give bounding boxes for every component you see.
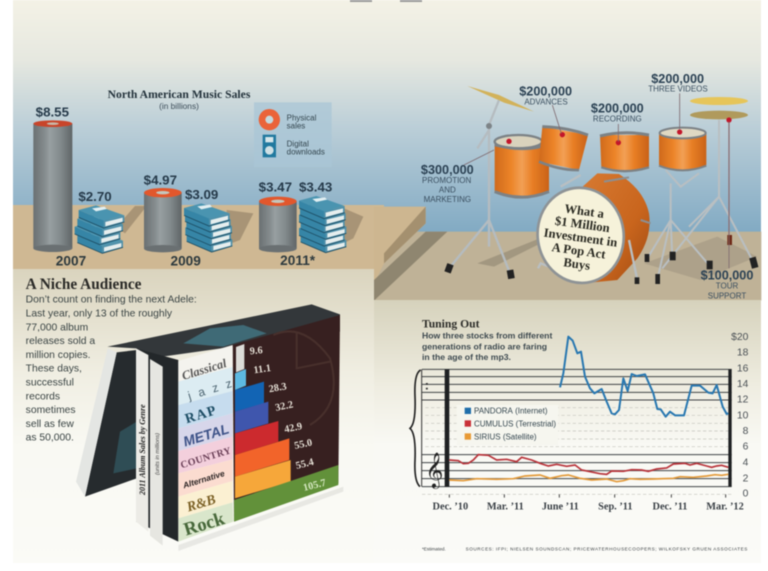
subheading: (in billions): [159, 101, 199, 111]
hardware stands: [645, 120, 758, 284]
body text: Last year, only 13 of the roughly: [26, 308, 173, 319]
legend: Physical: [287, 113, 317, 122]
genre labels: RAP: [183, 403, 219, 427]
panel: tuning out stock chart: [410, 318, 749, 552]
2011 bars: $3.43: [299, 180, 332, 195]
cost labels: TOUR: [716, 282, 738, 291]
bar values: 105.7: [302, 478, 327, 494]
drum title: Buys: [563, 255, 591, 273]
x axis: Dec. ’10: [433, 502, 468, 513]
tilted tom: advances: [539, 127, 588, 170]
2007 bars: [33, 104, 124, 269]
heading: A Niche Audience: [26, 276, 142, 293]
bar values: 32.2: [274, 399, 294, 414]
line: sirius: [449, 474, 728, 482]
drum title: $1 Million: [554, 214, 611, 235]
cost labels: RECORDING: [593, 114, 642, 123]
x axis: Dec. ’11: [652, 502, 687, 513]
2009 bars: $4.97: [144, 172, 177, 187]
y axis: 8: [743, 426, 749, 437]
cost labels: THREE VIDEOS: [648, 85, 708, 94]
panel: North American music sales: [13, 88, 384, 270]
y axis: [731, 332, 749, 500]
genre labels: [178, 345, 236, 542]
body text: sell as few: [26, 419, 74, 430]
legend: downloads: [287, 148, 325, 157]
y axis: 4: [743, 458, 749, 469]
stage floor: [374, 207, 761, 301]
bar values: 55.4: [295, 457, 315, 472]
cost labels: MARKETING: [424, 195, 471, 204]
cost labels: AND: [439, 185, 456, 194]
bar values: 42.9: [283, 421, 303, 436]
cost labels: ADVANCES: [524, 98, 568, 107]
2009 bars: $3.09: [185, 187, 218, 202]
tall tom: promotion and marketing: [495, 135, 549, 198]
body text: records: [26, 391, 60, 402]
body text: releases sold a: [26, 336, 95, 347]
heading: Tuning Out: [422, 318, 480, 331]
x axis: Mar. ’12: [706, 502, 744, 513]
2011 bars: $3.47: [259, 180, 292, 195]
left cymbal and stand: [444, 86, 534, 279]
subtitle: in the age of the mp3.: [422, 352, 511, 362]
legend: SIRIUS (Satellite): [474, 432, 537, 441]
legend: CUMULUS (Terrestrial): [474, 419, 556, 428]
heading: North American Music Sales: [108, 88, 251, 101]
music staff grid: [422, 369, 732, 494]
x axis: [433, 494, 744, 513]
drum title: A Pop Act: [551, 240, 607, 262]
2009 bars: [144, 172, 232, 269]
hi-hat cymbals: [690, 97, 748, 123]
y axis: 18: [737, 348, 749, 359]
bar values: 28.3: [268, 381, 288, 395]
subtitle: generations of radio are faring: [422, 341, 547, 351]
brace: [410, 370, 421, 487]
body text: Don’t count on finding the next Adele:: [26, 295, 197, 306]
bass drum with title: [531, 173, 651, 289]
2011 bars: [259, 180, 346, 268]
2007 bars: 2007: [56, 254, 86, 269]
body text: [26, 295, 197, 443]
genre labels: COUNTRY: [179, 445, 233, 471]
legend: Digital: [287, 139, 309, 148]
genre labels: Alternative: [181, 468, 226, 491]
genre labels: R&B: [184, 493, 218, 516]
panel backgrounds: lower sections: [13, 269, 761, 563]
panel: a niche audience: [26, 276, 343, 551]
page backgrounds: [13, 0, 761, 300]
bar values: 11.1: [253, 363, 272, 376]
middle tom: recording: [600, 133, 649, 171]
CD case illustration: (units in millions): [155, 433, 161, 475]
legend: [465, 406, 556, 441]
cost labels: SUPPORT: [708, 291, 746, 300]
body text: as 50,000.: [26, 432, 74, 443]
2007 bars: $2.70: [78, 189, 112, 204]
y axis: 2: [743, 473, 749, 484]
bass clef dots: :: [425, 377, 429, 392]
genre labels: Rock: [181, 508, 228, 540]
sources footnote: SOURCES: IFPI; NIELSEN SOUNDSCAN; PRICEWATERHOUSECOOPERS; WILKOFSKY GRUEN ASSOCIATES: [466, 547, 747, 552]
y axis: 16: [737, 363, 749, 374]
body text: sometimes: [26, 405, 76, 416]
subtitle: How three stocks from different: [422, 330, 552, 340]
body text: These days,: [26, 364, 82, 375]
x axis: Sep. ’11: [598, 502, 633, 513]
y axis: 14: [737, 379, 749, 390]
cost labels: $200,000: [651, 72, 704, 86]
panel: drum kit investment: [374, 72, 761, 301]
drum title: Investment in: [543, 226, 618, 250]
legend: [254, 102, 332, 167]
line: cumulus: [449, 455, 728, 474]
y axis: 12: [737, 395, 749, 406]
drum title: What a: [564, 202, 606, 221]
floor shadows: [117, 206, 363, 245]
genre labels: METAL: [181, 420, 231, 450]
2009 bars: 2009: [170, 254, 201, 269]
y axis: $20: [731, 332, 749, 343]
body text: successful: [26, 377, 74, 388]
bar values: 9.6: [249, 345, 263, 357]
y axis: 0: [743, 489, 749, 500]
CD case illustration: [76, 304, 343, 551]
cost labels: PROMOTION: [422, 176, 472, 185]
2007 bars: $8.55: [36, 104, 70, 119]
treble clef: 𝄞: [425, 452, 443, 489]
legend: sales: [287, 122, 305, 131]
CD case illustration: 2011 Album Sales by Genre: [138, 404, 147, 496]
brown cover: [233, 315, 340, 522]
genre bars: [234, 344, 338, 522]
floor tom: three videos: [659, 128, 706, 170]
case spine: [136, 348, 178, 542]
cost labels: [421, 72, 753, 300]
bar values: 55.0: [293, 437, 313, 452]
x axis: June ’11: [542, 502, 579, 513]
cost labels: $300,000: [421, 163, 474, 177]
legend: PANDORA (Internet): [474, 406, 548, 415]
y axis: 10: [737, 410, 749, 421]
2011 bars: 2011*: [280, 253, 316, 268]
x axis: Mar. ’11: [487, 502, 524, 513]
y axis: 6: [743, 442, 749, 453]
cost labels: $200,000: [591, 102, 644, 116]
line: pandora: [560, 337, 728, 417]
drum title: [539, 199, 622, 276]
cost labels: $200,000: [519, 85, 572, 99]
subtitle: [422, 330, 552, 362]
bar values: [249, 345, 327, 494]
body text: 77,000 album: [26, 322, 88, 333]
genre labels: Classical: [180, 356, 229, 383]
cost labels: $100,000: [701, 269, 753, 283]
genre labels: j a z z: [185, 376, 236, 403]
sources footnote: *Estimated.: [422, 547, 446, 552]
body text: million copies.: [26, 350, 91, 361]
